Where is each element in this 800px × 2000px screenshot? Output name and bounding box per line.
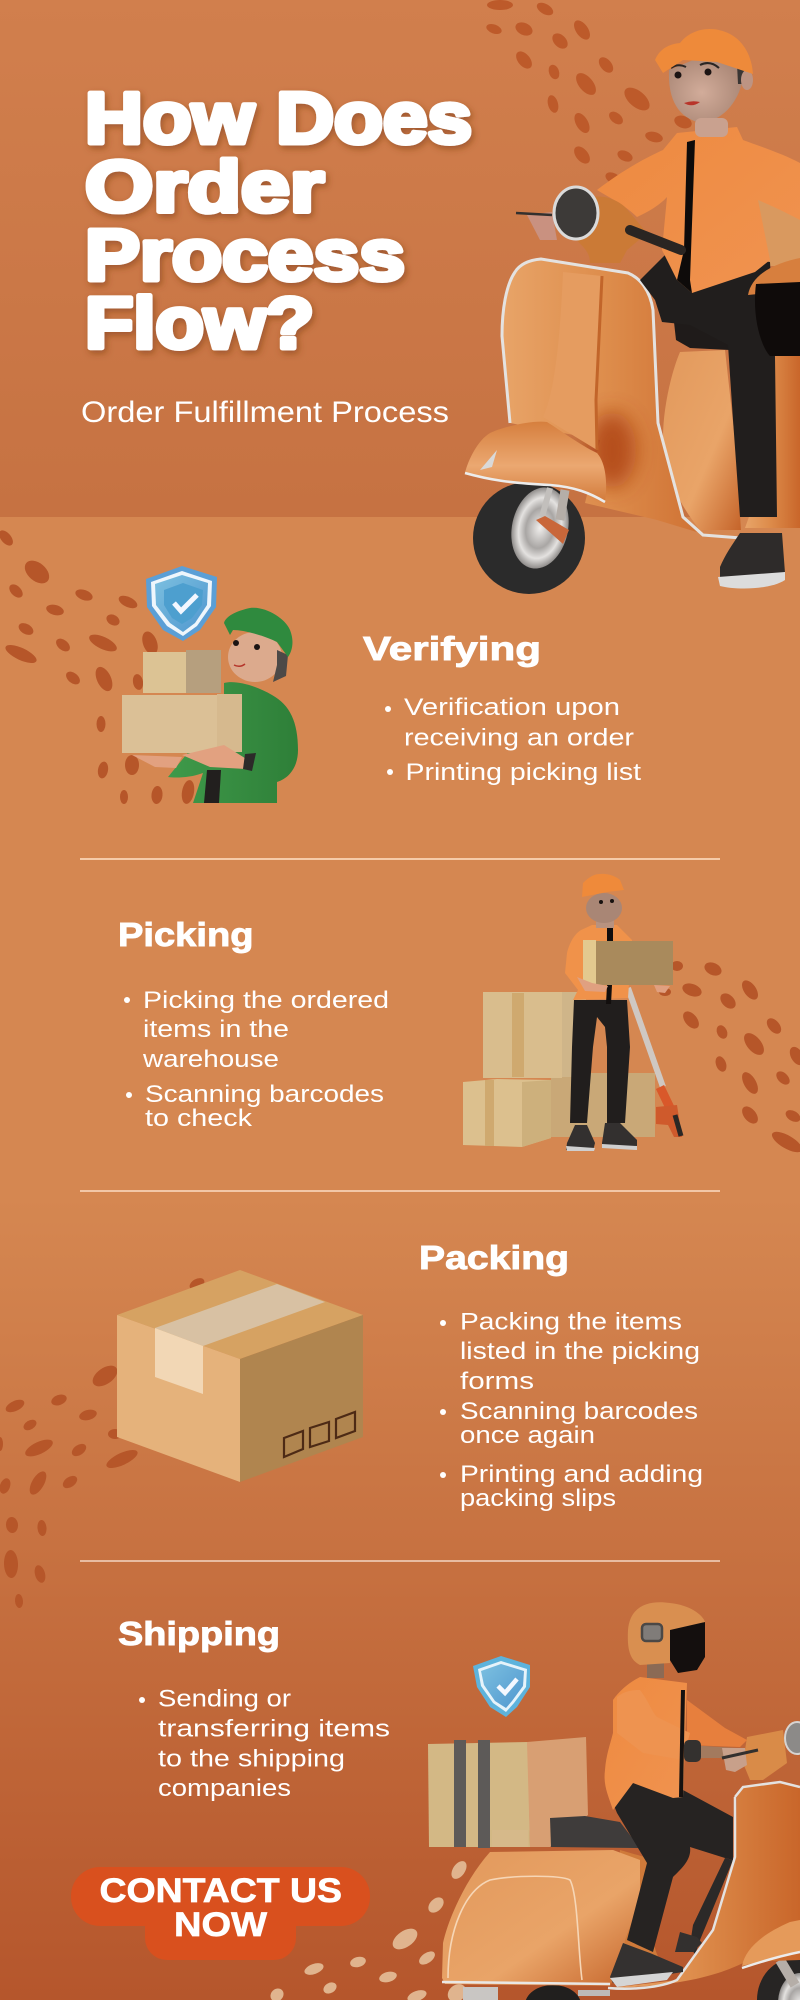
- shoe: [718, 533, 785, 588]
- list: picking: items in the: [143, 1016, 289, 1043]
- decorative dots: header: [485, 0, 694, 186]
- storage box: [748, 258, 800, 295]
- forearm and hand: [684, 1740, 758, 1772]
- list: picking: warehouse: [142, 1046, 279, 1073]
- inner scooter panel: [612, 1850, 670, 1985]
- icon: verified shield: [146, 566, 217, 641]
- title: How Does: [85, 79, 472, 159]
- list: picking: to check: [145, 1105, 253, 1132]
- trousers: [640, 250, 777, 517]
- list: verifying: [385, 694, 641, 786]
- illustration: rider on scooter with parcel: [428, 1602, 800, 2000]
- handling marks: [284, 1412, 355, 1457]
- button: contact us now: NOW: [174, 1906, 268, 1944]
- box top: [117, 1270, 363, 1359]
- green jacket: [168, 682, 298, 803]
- parcel behind courier: [750, 198, 800, 266]
- rear wheel and stand: [463, 1985, 610, 2000]
- heading: Verifying: Verifying: [363, 630, 541, 667]
- seat: [674, 322, 730, 350]
- box left face: [117, 1315, 240, 1482]
- decorative dots: picking: [659, 960, 800, 1156]
- far leg: [675, 1858, 733, 1955]
- header band: [0, 0, 800, 517]
- jacket: [605, 1677, 747, 1810]
- parcel: [428, 1737, 588, 1848]
- list: packing: Packing the items: [460, 1308, 682, 1336]
- title: Flow?: [85, 284, 314, 364]
- illustration: cardboard box: [117, 1270, 363, 1482]
- trolley: [628, 988, 682, 1137]
- decorative dots: verifying: [0, 528, 196, 805]
- list: picking: Scanning barcodes: [145, 1081, 384, 1108]
- list: shipping: to the shipping: [158, 1746, 345, 1772]
- list: picking: Picking the ordered: [143, 987, 389, 1014]
- title: Process: [85, 216, 405, 296]
- list: shipping: companies: [158, 1775, 291, 1802]
- head: [582, 874, 624, 1004]
- list: packing: Scanning barcodes: [460, 1398, 698, 1425]
- front shield: [610, 1782, 800, 1988]
- box right face: [240, 1315, 363, 1482]
- stacked boxes: [463, 992, 655, 1147]
- list: picking: [124, 987, 389, 1132]
- chrome trim: [502, 259, 741, 538]
- trousers: [570, 1000, 630, 1123]
- front wheel: [473, 482, 585, 594]
- list: shipping: transferring items: [158, 1716, 390, 1742]
- rear scooter body: [663, 350, 741, 530]
- cuff: [243, 753, 256, 771]
- seat: [550, 1816, 640, 1848]
- list: verifying: Verification upon: [404, 694, 620, 721]
- jacket: [565, 925, 632, 1000]
- head: [655, 29, 753, 137]
- button: contact us now: [71, 1867, 370, 1960]
- illustration: worker with boxes and trolley: [463, 874, 682, 1151]
- leg shield centre column: [543, 272, 602, 450]
- decorative dots: packing: [0, 1276, 206, 1608]
- trousers: [613, 1783, 733, 1952]
- hands: [132, 745, 248, 769]
- title: [85, 79, 472, 364]
- tape: [155, 1284, 325, 1394]
- illustration: courier on scooter: [465, 29, 800, 594]
- face: [224, 608, 292, 682]
- held box: [583, 940, 673, 985]
- shoes: [566, 1123, 637, 1151]
- small box: [143, 650, 221, 693]
- rear body: [442, 1850, 640, 1986]
- title: Order: [85, 148, 324, 228]
- list: packing: forms: [460, 1368, 534, 1395]
- decorative dots: bottom: [268, 1858, 470, 2000]
- shoe: [610, 1943, 683, 1987]
- list: packing: Printing and adding: [460, 1461, 703, 1488]
- list: packing: once again: [460, 1422, 595, 1449]
- button: contact us now: CONTACT US: [100, 1872, 342, 1910]
- heading: Packing: Packing: [419, 1239, 569, 1276]
- list: shipping: Sending or: [158, 1686, 291, 1712]
- icon: verified shield: [473, 1656, 530, 1717]
- helmet: [628, 1602, 705, 1678]
- front fender: [465, 422, 606, 502]
- list: packing: packing slips: [460, 1485, 616, 1512]
- large box: [122, 694, 242, 753]
- heading: Shipping: Shipping: [118, 1615, 280, 1652]
- list: verifying: Printing picking list: [406, 759, 641, 786]
- heading: Picking: Picking: [118, 916, 254, 953]
- list: packing: [440, 1308, 703, 1512]
- jacket: [597, 127, 800, 293]
- list: packing: listed in the picking: [460, 1338, 700, 1365]
- list: shipping: [139, 1686, 390, 1802]
- illustration: worker holding boxes: [122, 566, 298, 803]
- headlamp: [743, 1722, 800, 1780]
- list: verifying: receiving an order: [404, 724, 634, 752]
- hands: [577, 977, 670, 993]
- leg shield: [502, 259, 740, 538]
- headlamp and handlebar: [516, 187, 681, 263]
- front wheel: [757, 1958, 800, 2000]
- subtitle: Order Fulfillment Process: [81, 396, 449, 429]
